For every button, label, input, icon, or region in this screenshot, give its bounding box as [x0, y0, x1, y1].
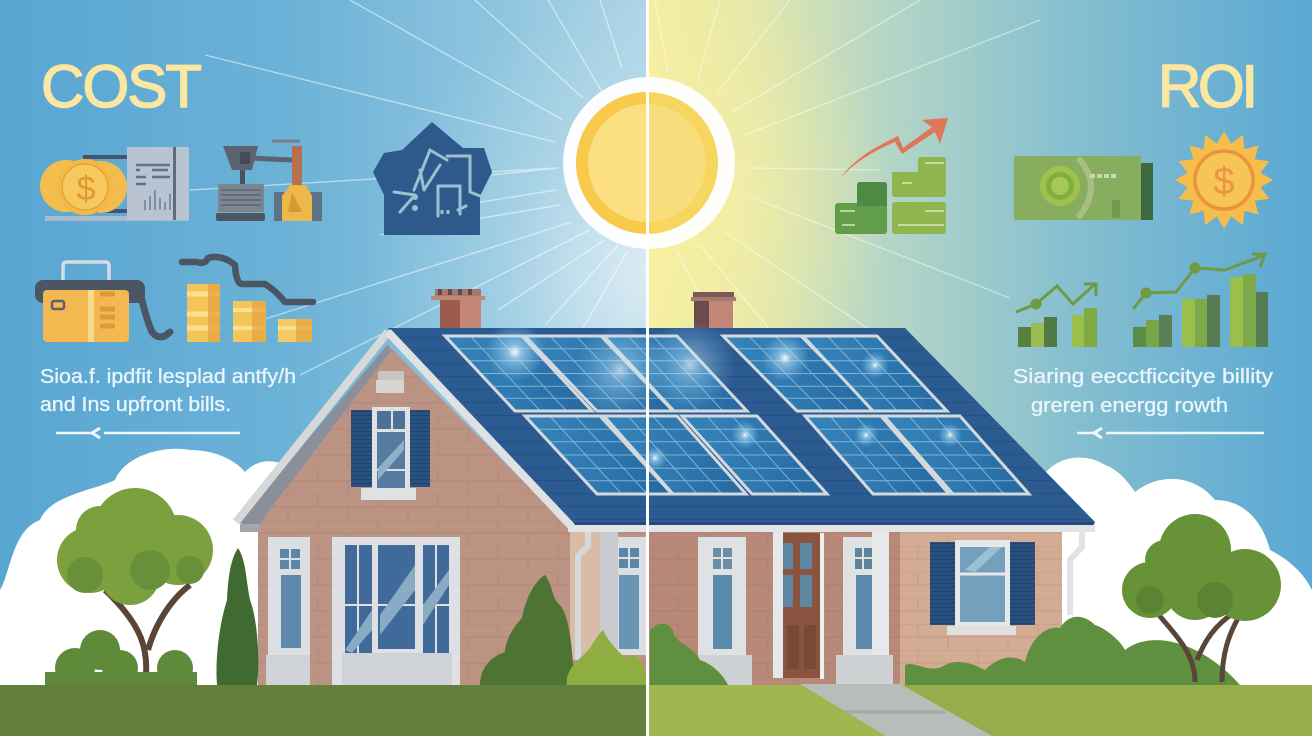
front path	[800, 684, 992, 736]
solar panels	[445, 320, 1029, 494]
cypress	[216, 548, 258, 685]
shrubs: left	[45, 630, 197, 688]
clouds: right	[1040, 457, 1312, 685]
roof	[388, 328, 1095, 528]
tree: right	[1122, 514, 1281, 682]
sun	[563, 77, 735, 249]
icon: sun with dollar: $	[1213, 161, 1235, 203]
house	[236, 328, 1095, 685]
text: ROI description: Siaring eecctficcitye billity	[1013, 366, 1273, 388]
icon: coin stacks and pipe	[182, 257, 313, 342]
gable vent	[376, 371, 404, 393]
clouds: left	[0, 449, 285, 685]
arrow: cost divider	[56, 428, 240, 438]
text: cost description: Sioa.f. ipdfit lesplad antfy/h	[40, 366, 296, 388]
heading: ROI: ROI	[1158, 53, 1258, 120]
text: ROI description	[1013, 366, 1273, 417]
icon: navy house	[373, 122, 492, 235]
right porch window 2	[836, 532, 893, 685]
text: ROI description: greren energg rowth	[1031, 395, 1228, 417]
icon: machinery	[216, 141, 322, 221]
lawn: right	[648, 685, 1312, 736]
chimney: right	[691, 292, 736, 329]
downspout and porch column	[578, 532, 648, 660]
chart: small rising bars	[1016, 284, 1097, 347]
text: cost description: and Ins upfront bills.	[40, 394, 231, 416]
icon: banknote	[1014, 156, 1153, 220]
gable window with shutters	[351, 407, 430, 500]
icon: red growth arrow	[840, 118, 948, 178]
right porch window 1	[698, 537, 752, 685]
house walls	[258, 345, 1062, 685]
divider line	[646, 0, 649, 736]
left narrow window	[266, 537, 310, 685]
front door	[783, 533, 824, 679]
chart: large rising bars	[1133, 254, 1268, 347]
right downspout	[1070, 532, 1082, 615]
bush: dark centre	[480, 575, 575, 685]
gable trim	[236, 332, 1095, 532]
icon: green credit blocks	[835, 157, 946, 234]
text: cost description	[40, 366, 296, 416]
tree: left	[57, 488, 213, 685]
bush: light centre	[567, 630, 648, 685]
bush: right of divider	[650, 624, 728, 685]
icon: coins and invoice	[40, 147, 189, 221]
chimney: left	[431, 289, 485, 329]
icon: tool bag with hose	[35, 262, 170, 342]
porch column	[773, 532, 783, 678]
arrow: ROI divider	[1077, 428, 1264, 438]
hedge: right	[905, 617, 1240, 685]
lawn: left	[0, 685, 648, 736]
right window with shutters	[930, 540, 1035, 635]
double door	[332, 537, 460, 685]
icon: coins and invoice: $	[77, 170, 96, 208]
sun rays	[190, 0, 1040, 375]
heading: COST: COST	[41, 53, 202, 120]
icon: sun with dollar	[1175, 131, 1273, 229]
